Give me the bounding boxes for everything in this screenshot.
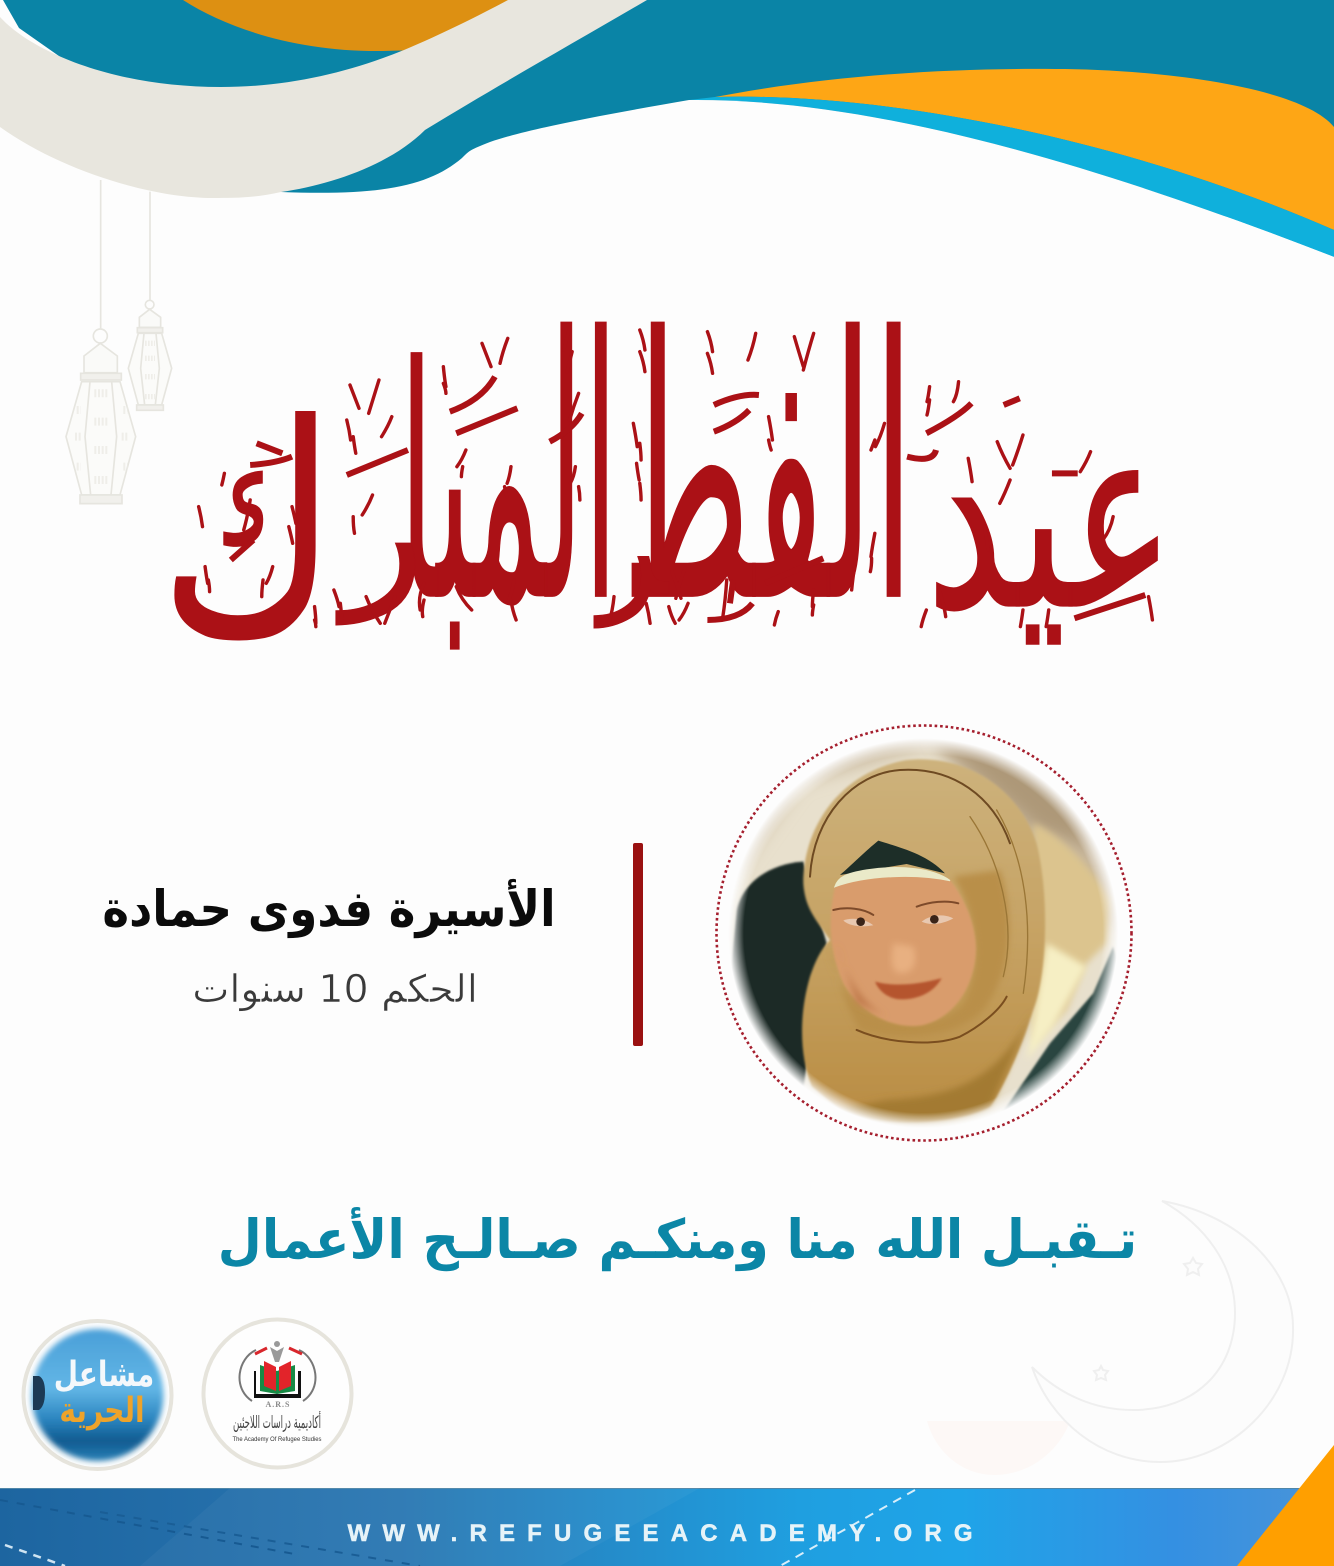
wave: orange bbox=[715, 69, 1334, 230]
footer URL: WWW.REFUGEEACADEMY.ORG bbox=[348, 1520, 972, 1547]
flag accents bbox=[255, 1348, 302, 1354]
title calligraphy: Eid al-Fitr Mubarak bbox=[160, 262, 1175, 701]
top wave banner bbox=[0, 0, 1334, 262]
footer band bbox=[0, 1445, 1334, 1566]
wave: beige ribbon bbox=[0, 0, 647, 198]
word: al-Mubarak alif: ‍ا bbox=[399, 301, 439, 672]
wave: teal band bbox=[3, 0, 1334, 240]
icon: small lantern bbox=[128, 192, 172, 410]
Arabic logo text: أكاديمية دراسات اللاجئين bbox=[233, 1411, 321, 1433]
wave: cyan bbox=[689, 97, 1334, 257]
photo: dotted ring bbox=[716, 726, 1132, 1140]
word: al-Mubarak kaf: ك bbox=[160, 364, 337, 701]
word: Eid: عيد bbox=[926, 365, 1175, 668]
book bbox=[254, 1361, 301, 1398]
corner triangle bbox=[1237, 1445, 1334, 1566]
decorative crescent moon bbox=[927, 1201, 1293, 1475]
photo: portrait illustration bbox=[731, 740, 1116, 1126]
English logo text: The Academy Of Refugee Studies bbox=[232, 1437, 322, 1443]
logo: Academy of Refugee Studies bbox=[204, 1320, 352, 1468]
ARS letters: A.R.S bbox=[265, 1400, 291, 1409]
word: al-Mubarak ra: ر bbox=[336, 438, 425, 625]
word: al-Fitr final letter: ‍ر bbox=[593, 465, 670, 628]
word: al-Mubarak body: الم‍ب‍ bbox=[435, 263, 618, 682]
faint pink disc bbox=[927, 1421, 1070, 1475]
wreath bbox=[240, 1350, 315, 1401]
logo: Mashael al-Hurriya bbox=[24, 1321, 172, 1469]
logo title: white word: مشاعل bbox=[54, 1355, 154, 1395]
closing greeting: تـقبـل الله منا ومنكـم صـالـح الأعمال bbox=[218, 1205, 1137, 1271]
prisoner name: الأسيرة فدوى حمادة bbox=[102, 878, 556, 939]
calligraphy ornaments bbox=[199, 330, 1152, 627]
divider bar bbox=[633, 843, 643, 1046]
logo title: orange word: الحرية bbox=[59, 1391, 145, 1431]
white below cyan edge bbox=[689, 100, 1334, 262]
wave: dark amber bbox=[183, 0, 510, 51]
figure bbox=[270, 1341, 284, 1362]
icon: hanging lanterns bbox=[66, 180, 172, 504]
sentence: 10 years: الحكم 10 سنوات bbox=[192, 968, 478, 1012]
star bbox=[1094, 1366, 1108, 1380]
icon: large lantern bbox=[66, 180, 136, 504]
word: al-Fitr body: الفط‍ bbox=[631, 262, 914, 681]
crescent bbox=[1032, 1201, 1293, 1462]
star bbox=[1184, 1258, 1202, 1275]
